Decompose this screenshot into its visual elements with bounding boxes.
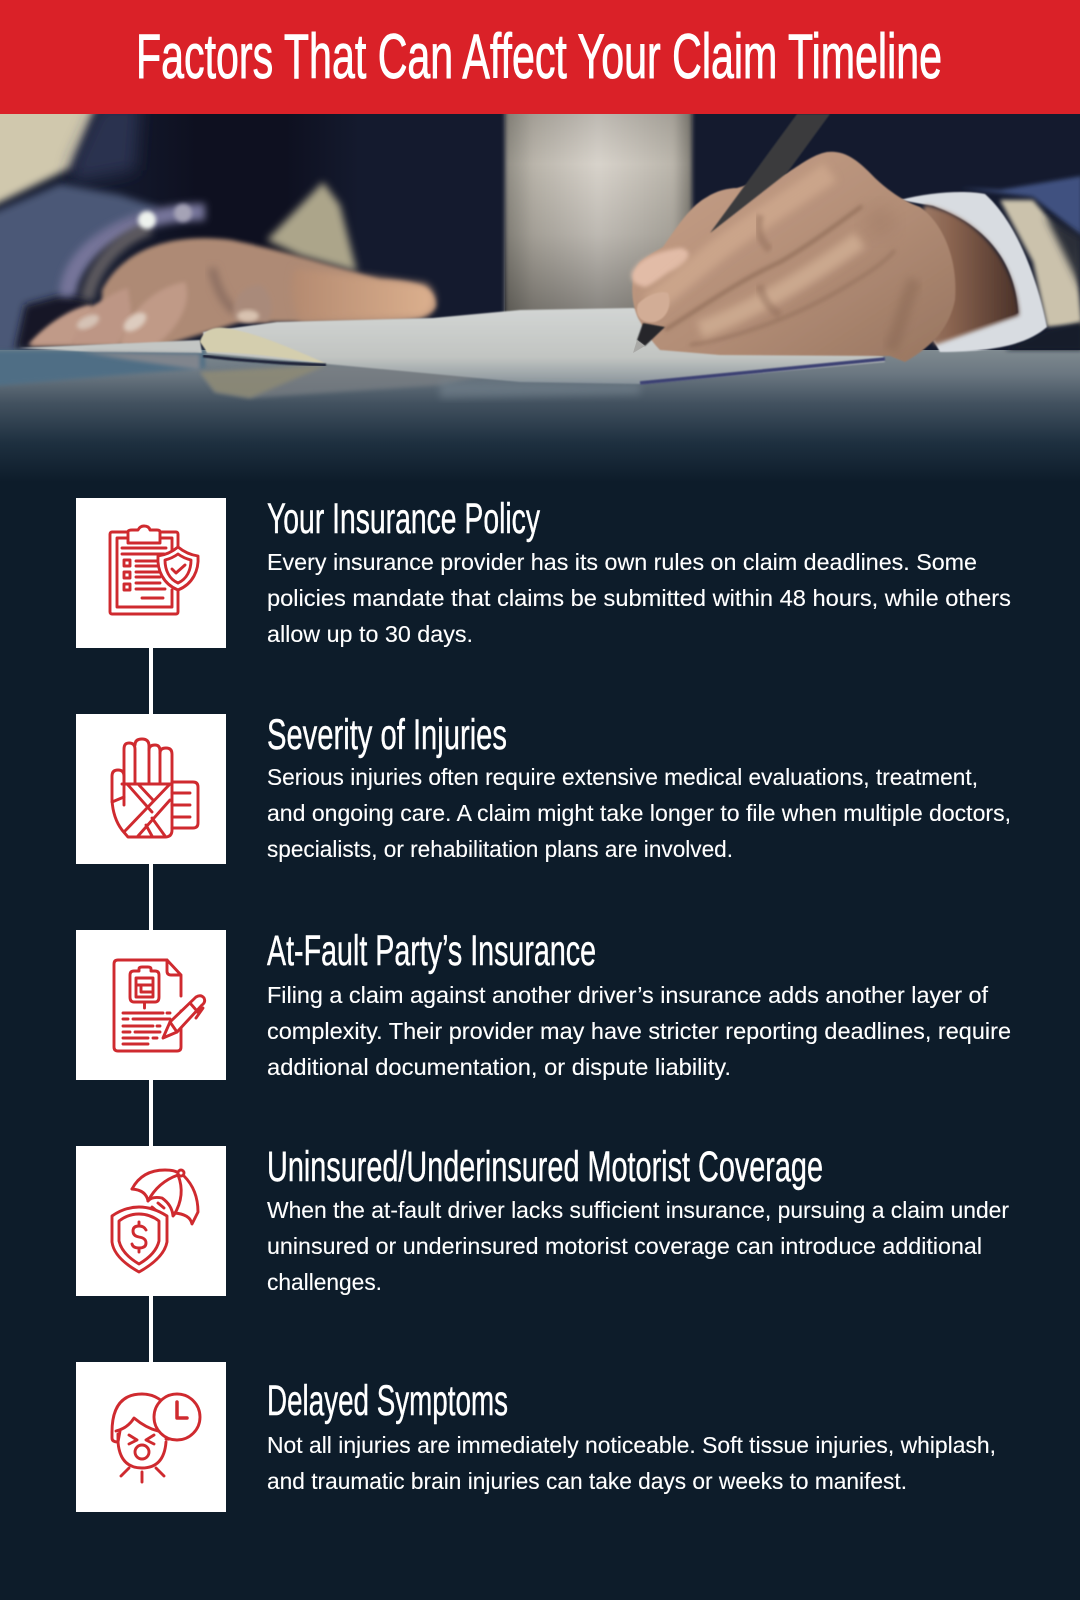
body text: and traumatic brain injuries can take days or weeks to manifest. bbox=[267, 1468, 907, 1494]
body text: When the at-fault driver lacks sufficient insurance, pursuing a claim under bbox=[267, 1197, 1009, 1223]
body text: additional documentation, or dispute liability. bbox=[267, 1054, 731, 1080]
body text: specialists, or rehabilitation plans are involved. bbox=[267, 836, 733, 862]
body text bbox=[267, 764, 1011, 862]
body text: Filing a claim against another driver’s insurance adds another layer of bbox=[267, 982, 988, 1008]
item: at-fault party's insurance bbox=[76, 928, 1011, 1080]
photo: hands writing on a notebook bbox=[0, 100, 1080, 482]
body text bbox=[267, 549, 1011, 647]
heading: Severity of Injuries bbox=[267, 712, 507, 759]
body text: policies mandate that claims be submitted within 48 hours, while others bbox=[267, 585, 1011, 611]
timeline connector bbox=[149, 640, 153, 1440]
body text: Not all injuries are immediately noticeable. Soft tissue injuries, whiplash, bbox=[267, 1432, 996, 1458]
body text bbox=[267, 982, 1011, 1080]
body text: challenges. bbox=[267, 1269, 382, 1295]
item: delayed symptoms bbox=[76, 1362, 996, 1512]
body text: complexity. Their provider may have stricter reporting deadlines, require bbox=[267, 1018, 1011, 1044]
body text: uninsured or underinsured motorist coverage can introduce additional bbox=[267, 1233, 982, 1259]
icon box: person in pain with clock bbox=[76, 1362, 226, 1512]
icon box: bandaged hand bbox=[76, 714, 226, 864]
body text bbox=[267, 1432, 996, 1494]
body text: allow up to 30 days. bbox=[267, 621, 473, 647]
body text bbox=[267, 1197, 1009, 1295]
heading: Your Insurance Policy bbox=[267, 496, 540, 543]
heading: At-Fault Party’s Insurance bbox=[267, 928, 596, 975]
icon box: umbrella over shield bbox=[76, 1146, 226, 1296]
body text: Every insurance provider has its own rules on claim deadlines. Some bbox=[267, 549, 977, 575]
body text: Serious injuries often require extensive medical evaluations, treatment, bbox=[267, 764, 978, 790]
body text: and ongoing care. A claim might take longer to file when multiple doctors, bbox=[267, 800, 1011, 826]
heading: Uninsured/Underinsured Motorist Coverage bbox=[267, 1144, 823, 1191]
item: your insurance policy bbox=[76, 496, 1011, 648]
heading: Delayed Symptoms bbox=[267, 1378, 508, 1425]
header banner bbox=[0, 0, 1080, 114]
icon box: document with IV bag and pen bbox=[76, 930, 226, 1080]
item: severity of injuries bbox=[76, 712, 1011, 864]
item: uninsured/underinsured motorist coverage bbox=[76, 1144, 1009, 1296]
icon box: clipboard with shield bbox=[76, 498, 226, 648]
